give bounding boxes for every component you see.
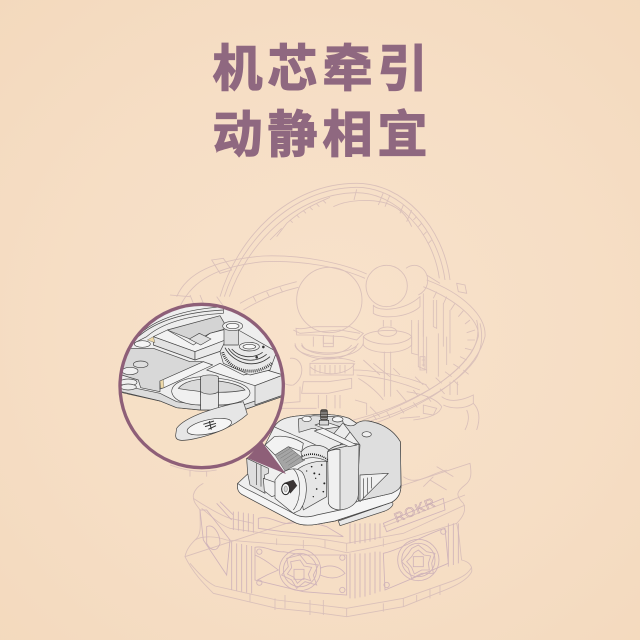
wedge pointer [247, 442, 286, 474]
plate underside lip [122, 388, 281, 410]
music box body [237, 414, 401, 525]
top recess [167, 316, 227, 342]
callout background [120, 304, 283, 468]
raised block top [153, 330, 224, 352]
top plate [274, 414, 357, 452]
gear housing [220, 330, 277, 375]
line art: orrery upper [170, 183, 485, 425]
title line 2: 动静相宜 [212, 107, 432, 163]
line art: ROKR brand text on base: ROKR [392, 494, 438, 525]
lever arms [314, 428, 357, 447]
line art: mid section [277, 320, 482, 430]
yellow tabs [147, 337, 164, 388]
winding knob [282, 480, 297, 495]
title [212, 41, 432, 163]
lever arm [176, 402, 247, 440]
music box movement [237, 410, 401, 526]
music box bottom tab [338, 502, 393, 526]
upper curved rim [130, 307, 223, 345]
music box base lip [237, 483, 401, 525]
screw post [319, 410, 329, 425]
cylinder end cap [275, 469, 306, 513]
upper hole [223, 321, 243, 331]
drum stud [362, 432, 371, 437]
right lower block [207, 363, 283, 386]
spindle collar arc [172, 377, 250, 405]
title line 1: 机芯牵引 [212, 41, 432, 97]
strip [160, 362, 213, 389]
plate [122, 306, 281, 410]
right slots [360, 473, 388, 502]
callout ring [120, 304, 283, 468]
zoom callout [110, 295, 287, 468]
lever recess [186, 418, 232, 436]
front column [328, 443, 359, 510]
pin cylinder [297, 461, 327, 510]
gear [301, 445, 329, 462]
line art: base [170, 463, 472, 617]
gear teeth [223, 352, 272, 371]
raised block side [153, 337, 195, 360]
spindle [201, 375, 218, 410]
left frame [247, 458, 268, 493]
lower hole [239, 342, 259, 351]
spring barrel drum [343, 421, 401, 501]
holes [120, 341, 150, 390]
illustration [118, 183, 486, 617]
left recess gray [122, 348, 204, 392]
inner wall [265, 436, 303, 455]
comb [275, 447, 305, 471]
square boss [189, 333, 211, 345]
lever hub [203, 421, 216, 430]
left frame slots [263, 478, 277, 497]
